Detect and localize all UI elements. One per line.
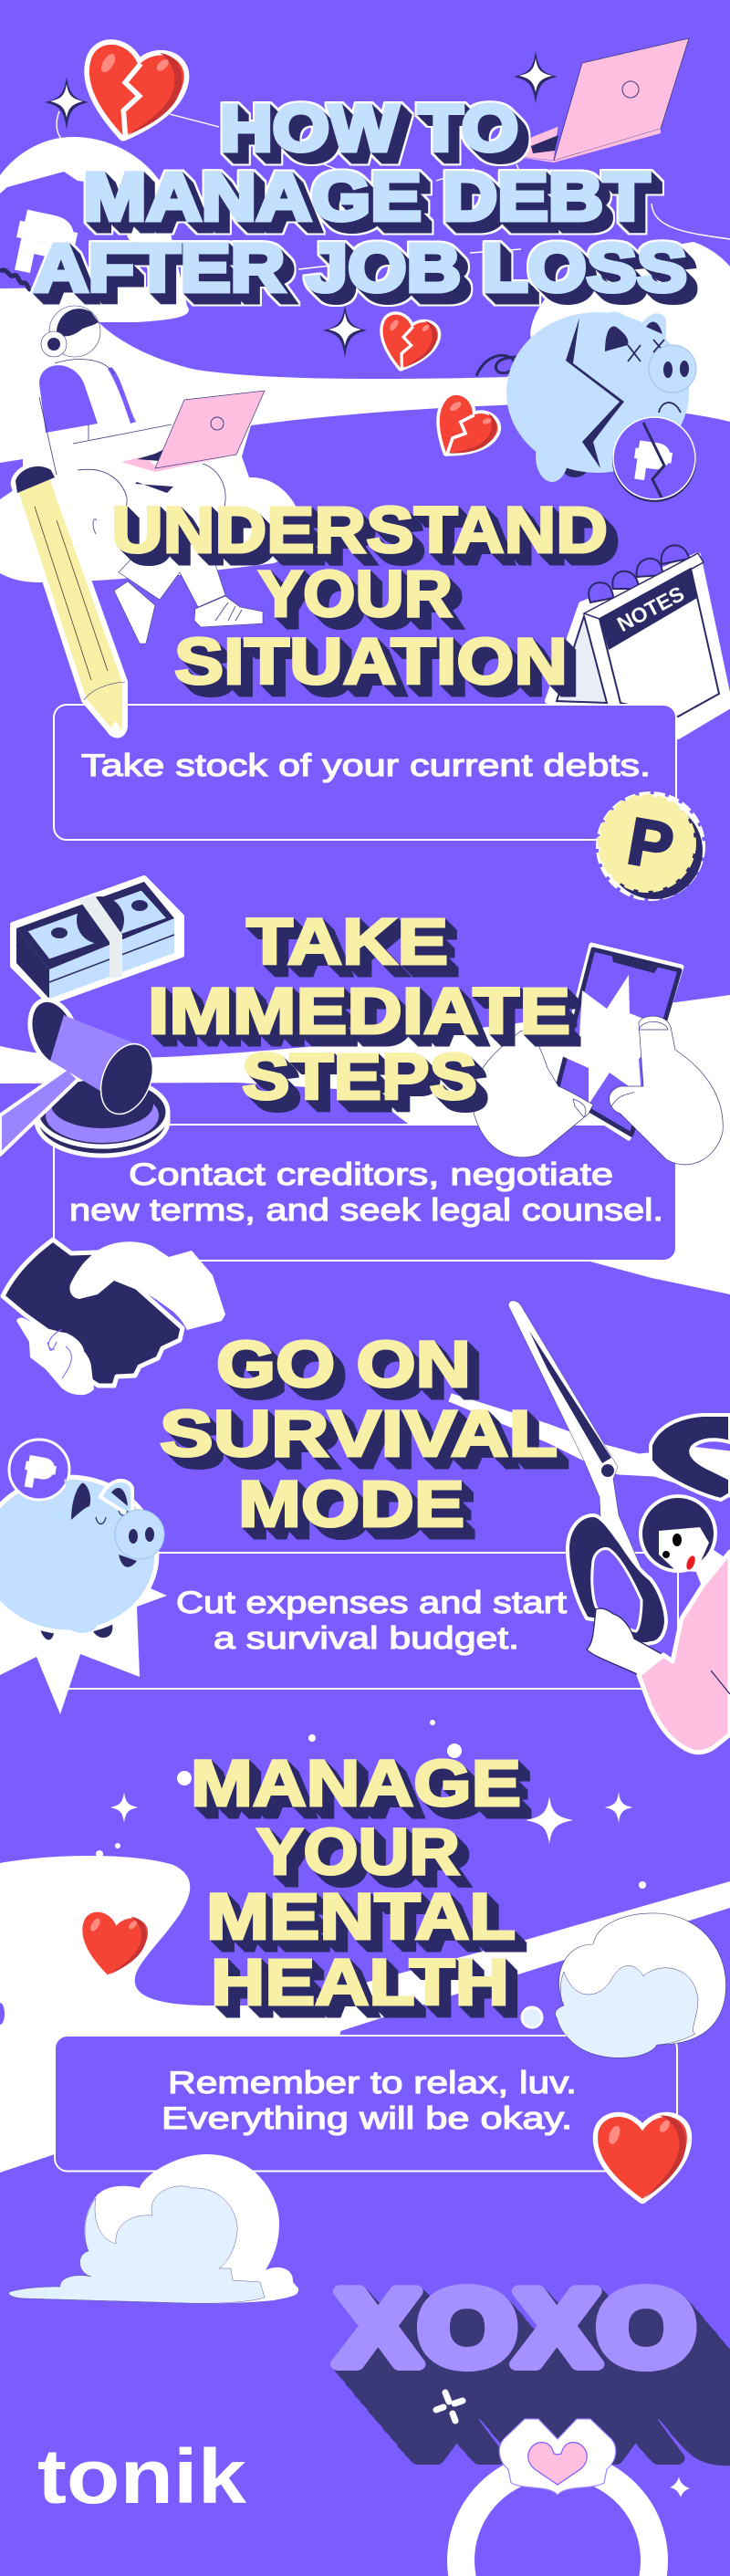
purple cut-out in top-left blob (0, 172, 160, 288)
text: survival body (176, 1586, 568, 1656)
heading: take immediate steps (148, 906, 570, 1114)
text: steps body: Contact creditors, negotiate (129, 1157, 613, 1192)
panel: manage your mental health (55, 2036, 677, 2171)
heading: understand your situation (111, 495, 608, 698)
squiggle (0, 270, 31, 289)
illustration: gavel (0, 993, 168, 1156)
squiggle near pig (476, 355, 525, 376)
illustration: handshake (3, 1240, 225, 1395)
white wave: lower (0, 1856, 730, 2173)
illustration: notes pad: NOTES (613, 581, 688, 636)
illustration: scissors (449, 1301, 730, 1644)
heading: manage your mental health: MANAGE (191, 1748, 521, 1820)
connector lines (57, 111, 730, 269)
decorative XOXO: XOXO (337, 2268, 694, 2387)
purple lobe (0, 2003, 5, 2025)
heading: manage your mental health: HEALTH (211, 1947, 509, 2019)
panel: take immediate steps (54, 1125, 676, 1261)
text: mental health body (162, 2066, 577, 2136)
heading: take immediate steps: IMMEDIATE (148, 976, 570, 1048)
heading: manage your mental health: MENTAL (206, 1881, 516, 1953)
illustration: piggy with coin and burst (0, 1440, 167, 1714)
icon: laptop top (516, 38, 689, 162)
icon: broken heart lower (422, 389, 504, 470)
title (34, 93, 687, 306)
illustration: phone (548, 945, 682, 1138)
text: steps body (69, 1157, 663, 1228)
heading: go on survival mode: SURVIVAL (160, 1398, 558, 1471)
text: survival body: Cut expenses and start (176, 1586, 568, 1620)
illustration: person on laptop (39, 306, 265, 644)
icon: broken heart large (77, 39, 188, 146)
illustration: broken piggy bank (506, 312, 696, 502)
icon: broken heart small (374, 311, 441, 375)
icon: sparkle right (514, 51, 558, 104)
icon: sparkle centre (323, 305, 367, 358)
icon: peso sign white: ₱ (7, 194, 82, 297)
shoes (114, 581, 263, 644)
icon: spark (436, 2393, 463, 2421)
logo: tonik: tonik (37, 2434, 246, 2519)
heading: go on survival mode (160, 1329, 558, 1541)
illustration: cloud lower (9, 2154, 298, 2303)
illustration: piggy with coin and burst: ₱ (21, 1448, 59, 1501)
heading: understand your situation: SITUATION (174, 626, 568, 698)
panel: survival mode (54, 1553, 678, 1689)
heading: manage your mental health (191, 1748, 521, 2019)
heading: go on survival mode: MODE (238, 1469, 464, 1541)
icon: pencil (14, 466, 125, 735)
text: steps body: new terms, and seek legal counsel. (69, 1193, 663, 1228)
text: mental health body: Remember to relax, luv. (168, 2066, 577, 2100)
title: AFTER JOB LOSS (34, 230, 687, 306)
illustration: notes pad (548, 545, 730, 737)
white wave: middle (0, 995, 730, 1294)
decorative dots and stars (96, 1720, 646, 1889)
icon: heart small (75, 1909, 151, 1981)
illustration: cloud right (522, 1913, 726, 2058)
illustration: broken piggy bank: ₱ (631, 430, 674, 494)
icon: heart outlined (598, 2116, 687, 2199)
heading: take immediate steps: TAKE (246, 906, 448, 979)
title: MANAGE DEBT (83, 159, 650, 235)
heading: manage your mental health: YOUR (256, 1817, 460, 1889)
heading: take immediate steps: STEPS (242, 1042, 477, 1114)
icon: small star (670, 2477, 690, 2497)
heading: understand your situation: UNDERSTAND (111, 495, 608, 567)
illustration: hands on phone (471, 1016, 723, 1165)
text: understand body: Take stock of your current debts. (81, 749, 651, 783)
text: mental health body: Everything will be okay. (162, 2101, 572, 2136)
icon: peso coin yellow: P (622, 805, 679, 885)
heading: go on survival mode: GO ON (216, 1329, 471, 1401)
laptop (121, 391, 265, 472)
icon: sparkle left (45, 77, 89, 130)
text: survival body: a survival budget. (214, 1621, 519, 1656)
heading: understand your situation: YOUR (258, 559, 453, 631)
panel: understand your situation (54, 705, 676, 840)
illustration: hands heart ring (461, 2419, 654, 2576)
icon: peso coin yellow (599, 794, 703, 899)
illustration: woman (587, 1496, 730, 1753)
title: HOW TO (220, 93, 518, 165)
illustration: cash stack (13, 878, 182, 1002)
white wave: top (0, 137, 730, 582)
